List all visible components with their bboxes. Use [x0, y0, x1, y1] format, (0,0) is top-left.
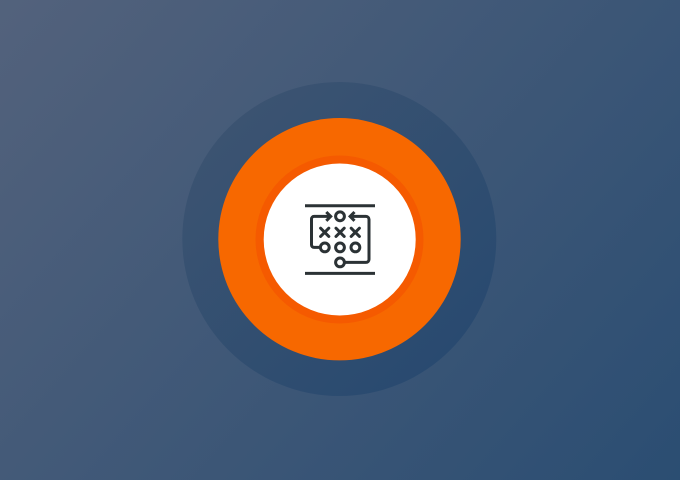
left arrow path [312, 212, 331, 247]
icon: playbook strategy diagram [305, 206, 375, 273]
top rule [305, 204, 375, 207]
outer navy ring [182, 82, 496, 396]
white center disc [264, 164, 416, 316]
right arrow path [345, 212, 369, 262]
inner dark orange ring [256, 156, 424, 324]
row of circles [320, 243, 360, 252]
orange ring [218, 118, 461, 360]
row of crosses [321, 228, 359, 236]
top and bottom circles [336, 212, 344, 267]
bottom rule [305, 272, 375, 275]
